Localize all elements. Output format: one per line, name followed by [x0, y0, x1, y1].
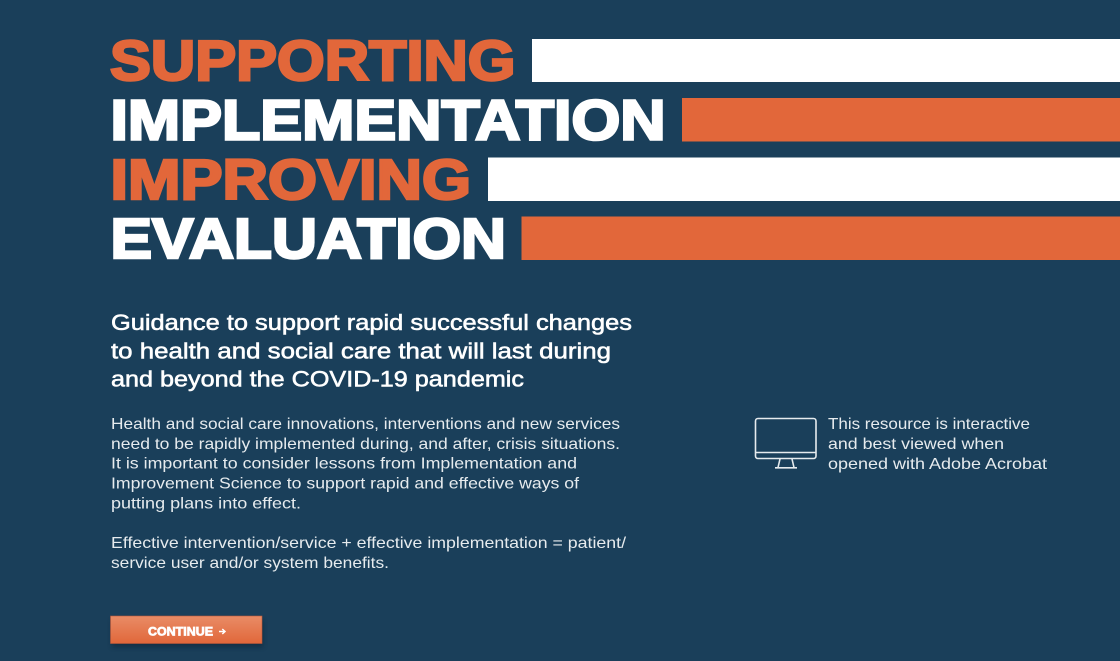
bar: orange 2	[522, 216, 1120, 260]
subheading: and beyond the COVID-19 pandemic	[111, 366, 524, 392]
body text	[111, 416, 627, 572]
bar: white 2	[488, 158, 1120, 201]
note: best viewed in Adobe Acrobat: and best viewed when	[828, 436, 1004, 453]
subheading: Guidance to support rapid successful changes	[111, 310, 632, 335]
subheading: to health and social care that will last during	[111, 338, 611, 364]
title line: IMPLEMENTATION: IMPLEMENTATION	[110, 88, 666, 152]
title	[110, 29, 666, 271]
body text: service user and/or system benefits.	[111, 555, 389, 572]
bar: white 1	[532, 39, 1120, 82]
note: best viewed in Adobe Acrobat: opened with Adobe Acrobat	[828, 456, 1048, 473]
body text: need to be rapidly implemented during, and after, crisis situations.	[111, 436, 620, 453]
body text: Effective intervention/service + effective implementation = patient/	[111, 535, 627, 552]
title bars	[488, 39, 1120, 260]
button: continue	[110, 616, 263, 647]
body text: Improvement Science to support rapid and effective ways of	[111, 476, 580, 492]
bar: orange 1	[682, 98, 1120, 142]
button: continue: CONTINUE	[148, 626, 213, 638]
title line: IMPROVING: IMPROVING	[110, 148, 471, 212]
note: best viewed in Adobe Acrobat: This resource is interactive	[828, 416, 1030, 433]
body text: Health and social care innovations, interventions and new services	[111, 416, 620, 433]
icon: computer monitor	[756, 418, 816, 468]
note: best viewed in Adobe Acrobat	[828, 416, 1048, 473]
body text: putting plans into effect.	[111, 496, 301, 512]
title line: EVALUATION: EVALUATION	[110, 207, 506, 271]
body text: It is important to consider lessons from Implementation and	[111, 456, 577, 472]
title line: SUPPORTING: SUPPORTING	[110, 29, 516, 93]
subheading	[111, 310, 632, 392]
icon: arrow	[219, 629, 225, 634]
